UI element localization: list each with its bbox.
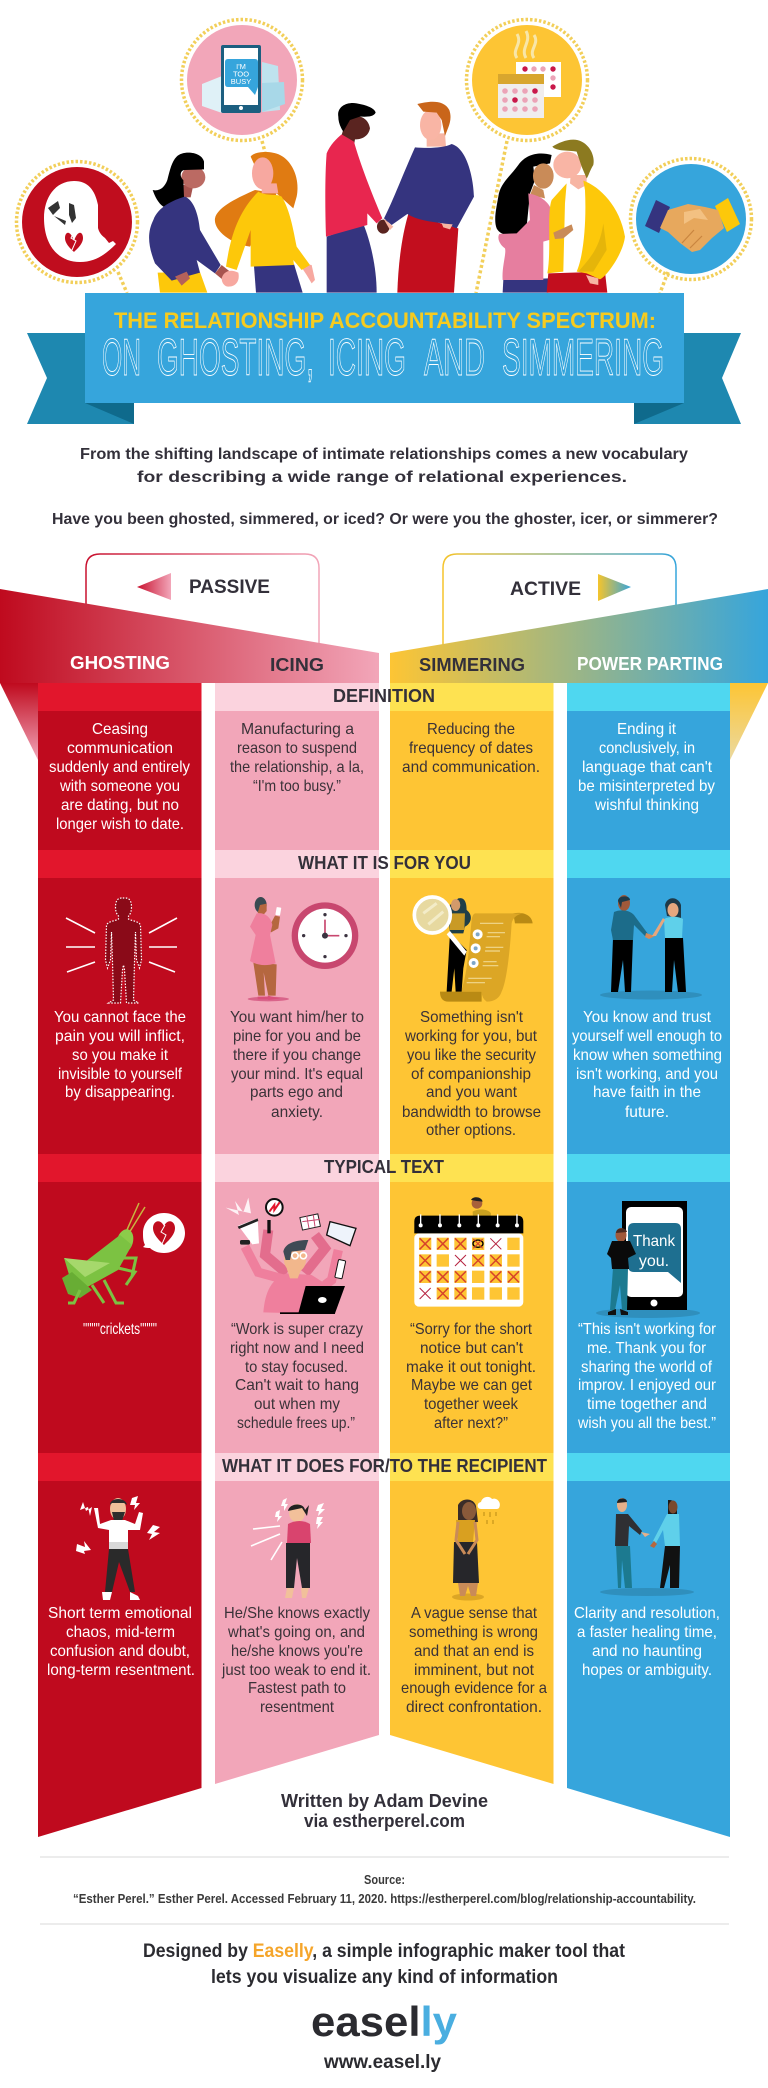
easelly logo: easelly — [311, 1998, 458, 2045]
side wing left — [0, 683, 38, 760]
icon: woman with phone and clock — [248, 897, 358, 1001]
icon: phone and ice circle: BUSY — [231, 77, 251, 86]
icon: phone and ice circle: I'M — [236, 62, 246, 71]
simmering recipient text: and that an end is — [414, 1643, 534, 1660]
title line two: AND — [424, 329, 485, 387]
icon: stressed woman — [251, 1498, 325, 1598]
illustration: man in navy sweater and woman with cardigan man — [383, 102, 625, 293]
icing recipient text: what's going on, and — [227, 1624, 365, 1641]
designer credit: lets you visualize any kind of information — [211, 1967, 558, 1988]
simmering typical text: Maybe we can get — [411, 1377, 533, 1394]
power parting typical text: “This isn't working for — [578, 1321, 717, 1338]
icon: phone saying thank you: Thank — [633, 1233, 676, 1250]
ghosting typical text: """"crickets"""" — [83, 1321, 157, 1338]
simmering what it is text: other options. — [426, 1122, 516, 1139]
intro text — [52, 446, 718, 528]
column heading: icing: ICING — [270, 655, 324, 675]
icing what it is text: pine for you and be — [233, 1028, 361, 1045]
ghosting recipient text: chaos, mid-term — [66, 1624, 175, 1641]
ghosting what it is text — [54, 1009, 186, 1101]
power parting definition text: language that can't — [582, 759, 713, 776]
ghosting what it is text: so you make it — [72, 1047, 169, 1064]
power parting what it is text: future. — [625, 1104, 669, 1121]
section heading: typical text: TYPICAL TEXT — [324, 1157, 444, 1177]
power parting typical text — [577, 1321, 717, 1432]
simmering typical text: make it out tonight. — [406, 1359, 536, 1376]
icing typical text: right now and I need — [230, 1340, 364, 1357]
power parting what it is text: You know and trust — [583, 1009, 712, 1026]
side wing right — [730, 683, 768, 760]
illustration: couple two holding hands — [325, 103, 390, 293]
simmering definition text — [402, 721, 540, 776]
power parting what it is text: yourself well enough to — [572, 1028, 722, 1045]
ghosting recipient text: Short term emotional — [48, 1605, 192, 1622]
ghosting recipient text: long-term resentment. — [47, 1662, 195, 1679]
intro text: Have you been ghosted, simmered, or iced? Or were you the ghoster, icer, or simmerer? — [52, 511, 718, 528]
panel: icing column — [215, 683, 379, 1784]
icon: woman with magnifier and scroll — [414, 897, 533, 1002]
title line one: THE RELATIONSHIP ACCOUNTABILITY SPECTRUM: — [114, 308, 656, 333]
power parting definition text: be misinterpreted by — [578, 778, 715, 795]
section heading: what it does: WHAT IT DOES FOR/TO THE RECIPIENT — [222, 1456, 547, 1476]
icon: phone saying thank you: you. — [639, 1253, 669, 1270]
simmering definition text: Reducing the — [427, 721, 515, 738]
icon: angry man with bolts — [76, 1496, 160, 1600]
ghosting recipient text — [47, 1605, 195, 1679]
icon: parting handshake pair — [600, 1498, 694, 1596]
power parting typical text: improv. I enjoyed our — [578, 1377, 717, 1394]
ghosting definition text: Ceasing — [92, 721, 148, 738]
simmering recipient text: enough evidence for a — [401, 1680, 547, 1697]
icing definition text: reason to suspend — [237, 740, 357, 757]
ghosting recipient text: confusion and doubt, — [50, 1643, 190, 1660]
simmering what it is text — [402, 1009, 541, 1139]
column heading: ghosting: GHOSTING — [70, 653, 170, 673]
icon: phone and ice circle — [182, 20, 302, 152]
icon: two people shaking hands — [600, 895, 702, 1000]
title line two — [102, 329, 664, 387]
title line two: GHOSTING, — [157, 329, 314, 387]
icing recipient text: resentment — [260, 1699, 335, 1716]
power parting recipient text — [574, 1605, 720, 1679]
ghosting definition text: with someone you — [59, 778, 180, 795]
simmering typical text: “Sorry for the short — [410, 1321, 533, 1338]
simmering recipient text: A vague sense that — [411, 1605, 538, 1622]
ghosting definition text: communication — [67, 740, 173, 757]
power parting definition text: conclusively, in — [599, 740, 695, 757]
simmering recipient text: imminent, but not — [414, 1662, 535, 1679]
column heading: power parting: POWER PARTING — [577, 654, 723, 674]
spectrum fan left — [0, 589, 379, 683]
icing definition text — [230, 721, 364, 795]
section heading: definition: DEFINITION — [333, 686, 435, 706]
ghosting definition text: are dating, but no — [61, 797, 179, 814]
designer credit: Designed by Easelly, a simple infographic maker tool that — [143, 1941, 626, 1962]
icing what it is text: anxiety. — [271, 1104, 323, 1121]
ghosting definition text — [49, 721, 190, 833]
simmering definition text: frequency of dates — [409, 740, 533, 757]
illustration: couple one holding hands — [149, 152, 315, 293]
icon: phone saying thank you — [596, 1201, 700, 1318]
icing recipient text: He/She knows exactly — [224, 1605, 370, 1622]
spectrum fan right — [390, 589, 768, 683]
source citation — [73, 1872, 696, 1906]
icing what it is text: there if you change — [233, 1047, 361, 1064]
icing what it is text: You want him/her to — [230, 1009, 364, 1026]
ghosting what it is text: invisible to yourself — [58, 1066, 183, 1083]
icon: overwhelmed multitasking man — [226, 1198, 356, 1314]
power parting typical text: wish you all the best.” — [577, 1415, 716, 1432]
simmering typical text: after next?” — [434, 1415, 508, 1432]
power parting what it is text: isn't working, and you — [576, 1066, 718, 1083]
simmering what it is text: working for you, but — [404, 1028, 538, 1045]
icon: phone and ice circle: TOO — [233, 70, 249, 78]
icon: invisible body — [66, 898, 177, 1003]
power parting typical text: me. Thank you for — [587, 1340, 707, 1357]
ghosting what it is text: pain you will inflict, — [55, 1028, 185, 1045]
power parting what it is text — [572, 1009, 722, 1121]
power parting definition text: wishful thinking — [594, 797, 699, 814]
simmering what it is text: and you want — [426, 1084, 518, 1101]
power parting recipient text: hopes or ambiguity. — [582, 1662, 712, 1679]
author credit: Written by Adam Devine — [281, 1791, 488, 1811]
power parting recipient text: Clarity and resolution, — [574, 1605, 720, 1622]
icing recipient text: he/she knows you're — [231, 1643, 363, 1660]
power parting recipient text: a faster healing time, — [577, 1624, 717, 1641]
icing definition text: “I'm too busy.” — [253, 778, 341, 795]
source citation: “Esther Perel.” Esther Perel. Accessed February 11, 2020. https://estherperel.com/blog/relationship-accountability. — [73, 1891, 696, 1906]
section heading: what it is for you: WHAT IT IS FOR YOU — [298, 853, 471, 873]
icing typical text — [230, 1321, 364, 1432]
panel: ghosting column — [38, 683, 202, 1837]
simmering recipient text: something is wrong — [409, 1624, 538, 1641]
simmering what it is text: bandwidth to browse — [402, 1104, 541, 1121]
simmering typical text — [406, 1321, 536, 1432]
panel: simmering column — [390, 683, 554, 1784]
icing typical text: Can't wait to hang — [235, 1377, 359, 1394]
icon: steaming calendars circle — [466, 20, 588, 293]
power parting recipient text: and no haunting — [592, 1643, 702, 1660]
icing typical text: out when my — [254, 1396, 340, 1413]
author credit — [281, 1791, 488, 1831]
ghosting definition text: longer wish to date. — [56, 816, 184, 833]
simmering what it is text: you like the security — [407, 1047, 536, 1064]
simmering typical text: together week — [424, 1396, 519, 1413]
icing definition text: the relationship, a la, — [230, 759, 364, 776]
website url: www.easel.ly — [323, 2052, 441, 2073]
power parting what it is text: know when something — [573, 1047, 722, 1064]
simmering recipient text — [401, 1605, 547, 1716]
ghosting definition text: suddenly and entirely — [49, 759, 190, 776]
panel: power parting column — [567, 683, 730, 1837]
icing what it is text: parts ego and — [250, 1084, 343, 1101]
icon: calendar with crossed dates — [414, 1197, 523, 1307]
panel: active label — [443, 554, 676, 660]
panel: passive label: PASSIVE — [189, 576, 270, 598]
ghosting what it is text: by disappearing. — [65, 1084, 175, 1101]
intro text: for describing a wide range of relational experiences. — [137, 469, 627, 486]
simmering what it is text: Something isn't — [420, 1009, 524, 1026]
column heading: simmering: SIMMERING — [419, 655, 525, 675]
icing what it is text — [230, 1009, 364, 1121]
power parting definition text: Ending it — [617, 721, 677, 738]
power parting typical text: sharing the world of — [581, 1359, 713, 1376]
designer credit — [143, 1941, 626, 1988]
icing recipient text: Fastest path to — [248, 1680, 346, 1697]
title line two: ICING — [328, 329, 406, 387]
simmering what it is text: of companionship — [411, 1066, 531, 1083]
panel: passive label — [86, 554, 319, 660]
title line two: ON — [102, 329, 141, 387]
title banner — [27, 293, 741, 424]
icon: grasshopper with broken heart bubble — [62, 1203, 185, 1303]
icon: handshake circle — [630, 158, 752, 293]
icon: ghost circle — [16, 162, 138, 293]
power parting typical text: time together and — [587, 1396, 707, 1413]
simmering recipient text: direct confrontation. — [406, 1699, 542, 1716]
simmering definition text: and communication. — [402, 759, 540, 776]
intro text: From the shifting landscape of intimate relationships comes a new vocabulary — [80, 446, 688, 463]
icing what it is text: your mind. It's equal — [231, 1066, 363, 1083]
icon: uneasy woman under rain cloud — [452, 1497, 500, 1600]
icing recipient text — [221, 1605, 371, 1716]
ghosting what it is text: You cannot face the — [54, 1009, 186, 1026]
icing typical text: to stay focused. — [245, 1359, 348, 1376]
panel: active label: ACTIVE — [510, 578, 581, 600]
source citation: Source: — [364, 1872, 405, 1887]
author credit: via estherperel.com — [304, 1811, 465, 1831]
power parting what it is text: have faith in the — [593, 1084, 701, 1101]
power parting definition text — [578, 721, 715, 814]
simmering typical text: notice but can't — [420, 1340, 524, 1357]
icing recipient text: just too weak to end it. — [221, 1662, 371, 1679]
icing typical text: schedule frees up.” — [237, 1415, 355, 1432]
icing definition text: Manufacturing a — [241, 721, 354, 738]
icing typical text: “Work is super crazy — [231, 1321, 363, 1338]
